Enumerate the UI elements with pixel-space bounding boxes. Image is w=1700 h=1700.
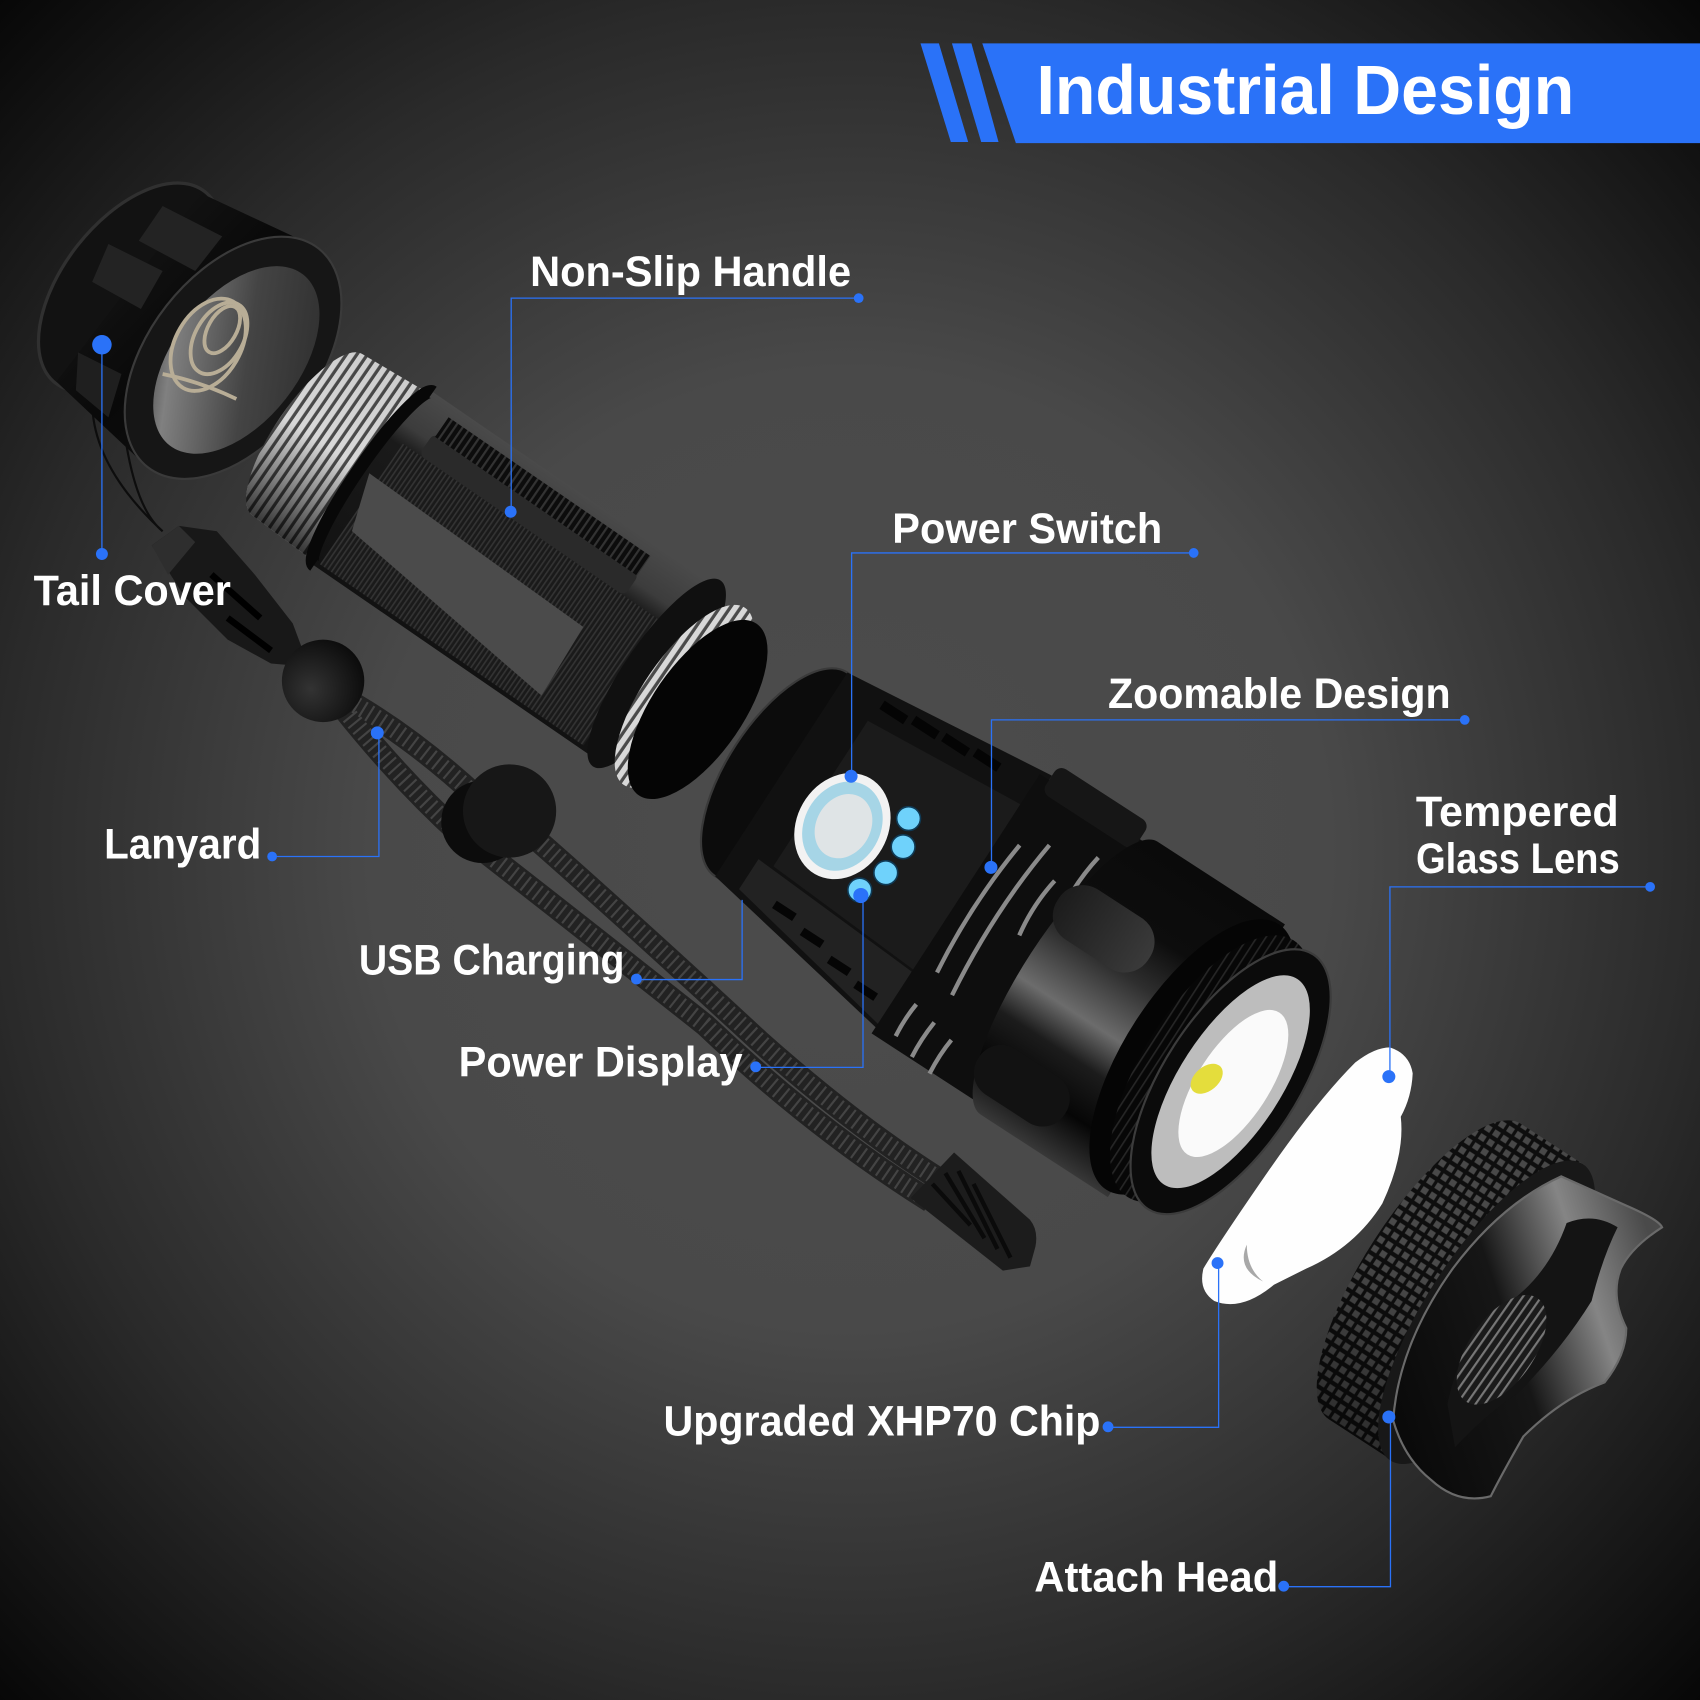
callout: Power Switch [845, 505, 1199, 783]
rear ring [670, 643, 893, 906]
rear threads [224, 332, 431, 563]
knurled ring [1279, 1091, 1585, 1461]
ribbed grip [320, 444, 666, 745]
large head [942, 817, 1285, 1197]
power indicators [848, 807, 920, 902]
callout: Zoomable Design [984, 670, 1470, 874]
inner threads [1439, 1280, 1564, 1420]
power switch and indicators [775, 755, 920, 902]
callout: Power Display [459, 888, 868, 1086]
bead [282, 640, 364, 722]
callout: Non-Slip Handle: Non-Slip Handle [530, 248, 851, 295]
callout: Tail Cover [34, 335, 231, 614]
callout: Non-Slip Handle [505, 248, 864, 518]
LED [1185, 1058, 1228, 1100]
neck fins [870, 759, 1164, 1109]
top slits [879, 692, 1002, 781]
callout: Tail Cover: Tail Cover [34, 567, 231, 614]
callout: Upgraded XHP70 Chip [664, 1257, 1224, 1444]
bottom slits [760, 901, 890, 1001]
body [300, 382, 725, 766]
cord stopper [441, 764, 556, 863]
attach head [1278, 1091, 1662, 1498]
scalloped crown [1393, 1176, 1662, 1498]
tempered glass lens [1202, 1047, 1413, 1304]
title: Industrial Design [1036, 51, 1574, 129]
flashlight head assembly [640, 611, 1381, 1256]
callout: Attach Head: Attach Head [1034, 1554, 1278, 1601]
handle tube [218, 323, 803, 823]
knurled groove [419, 433, 639, 596]
battery opening [601, 598, 794, 821]
callout: Upgraded XHP70 Chip: Upgraded XHP70 Chip [664, 1397, 1100, 1444]
lanyard clip [152, 526, 309, 667]
callout: Power Switch: Power Switch [892, 505, 1162, 552]
threaded front [1050, 888, 1335, 1226]
battery section [693, 652, 1052, 1035]
callout: Tempered Glass Lens: Glass Lens [1416, 835, 1620, 882]
lens bezel [1092, 918, 1370, 1246]
tail cover [2, 150, 385, 519]
spring [155, 285, 261, 404]
callout: USB Charging [359, 900, 742, 984]
callout: Attach Head [1034, 1411, 1395, 1601]
grip facets [76, 206, 222, 417]
flat panel [321, 473, 590, 696]
callout: Zoomable Design: Zoomable Design [1108, 670, 1451, 717]
callout: Tempered Glass Lens: Tempered [1416, 788, 1619, 835]
front collar [566, 562, 747, 785]
callout: Power Display: Power Display [459, 1039, 743, 1086]
cord end cap [911, 1152, 1036, 1271]
callout: USB Charging: USB Charging [359, 937, 624, 984]
crown opening [1447, 1218, 1618, 1447]
callout: Lanyard: Lanyard [104, 821, 261, 868]
lanyard [92, 401, 1036, 1271]
callout: Lanyard [104, 726, 384, 868]
callout: Tempered Glass Lens [1382, 788, 1655, 1083]
title banner [920, 43, 1700, 143]
